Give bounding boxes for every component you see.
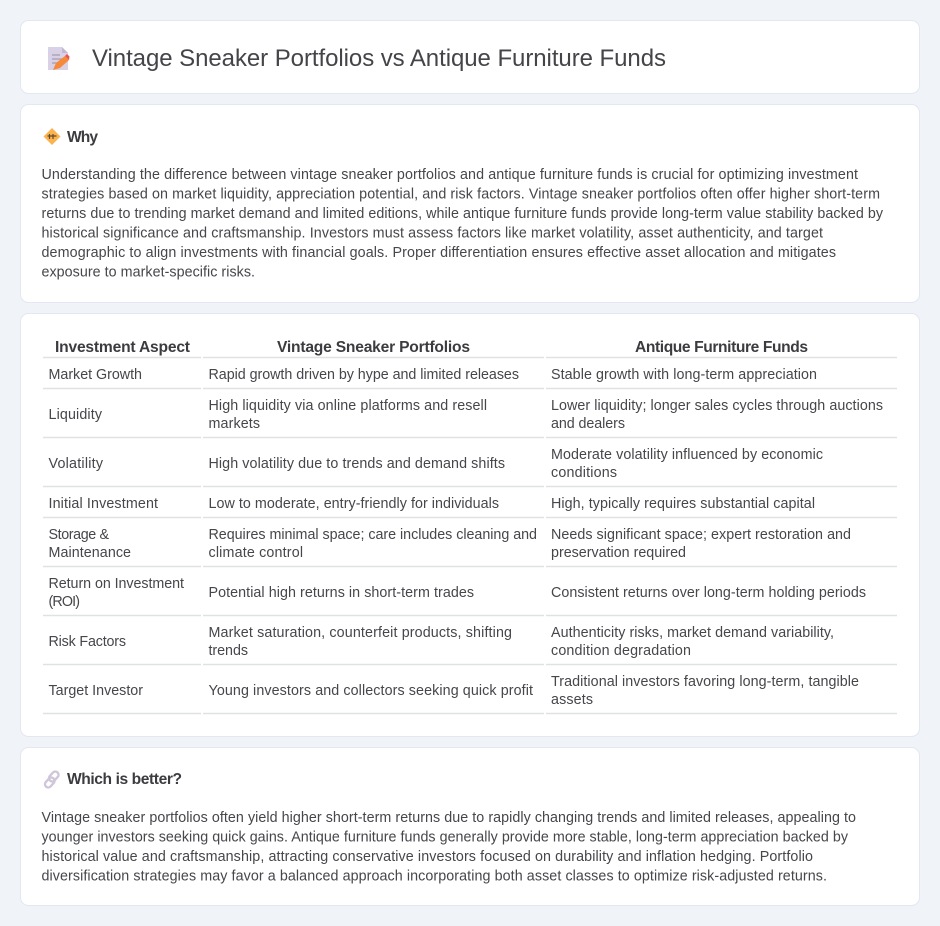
table header: Vintage Sneaker Portfolios bbox=[277, 339, 470, 356]
row: target investor: assets bbox=[551, 692, 593, 708]
row: volatility: High volatility due to trends and demand shifts bbox=[208, 456, 505, 472]
row: liquidity: and dealers bbox=[551, 416, 625, 432]
text block: which is better paragraph: historical value and craftsmanship, attracting conservative investors focused on durability and inflation hedging. Portfolio bbox=[42, 849, 813, 865]
row: storage and maintenance: Maintenance bbox=[48, 545, 131, 561]
row: market growth: Market Growth bbox=[48, 367, 142, 383]
row: market growth bbox=[48, 367, 817, 383]
row: target investor: Young investors and collectors seeking quick profit bbox=[208, 683, 533, 699]
panel: comparison table bbox=[20, 314, 920, 736]
row: risk factors: condition degradation bbox=[551, 643, 691, 659]
text block: why paragraph: returns due to trending market demand and limited editions, while antique furniture funds provide long-term value stability backed by bbox=[42, 206, 884, 222]
heading: why: Why bbox=[67, 129, 98, 146]
row: return on investment: Potential high returns in short-term trades bbox=[208, 585, 474, 601]
row: liquidity: High liquidity via online platforms and resell bbox=[208, 398, 487, 414]
text block: why paragraph bbox=[42, 167, 884, 280]
row: target investor: Traditional investors favoring long-term, tangible bbox=[551, 674, 859, 690]
table header: Investment Aspect bbox=[55, 339, 190, 356]
row: risk factors: trends bbox=[208, 643, 248, 659]
text block: why paragraph: demographic to align investments with financial goals. Proper differentiation ensures effective asset allocation and mitigates bbox=[42, 245, 836, 261]
row: initial investment bbox=[48, 496, 815, 512]
row: storage and maintenance: preservation required bbox=[551, 545, 686, 561]
row: return on investment bbox=[48, 576, 866, 610]
row: liquidity: markets bbox=[208, 416, 260, 432]
heading: which is better: Which is better? bbox=[67, 771, 182, 788]
row: risk factors bbox=[48, 625, 834, 659]
row: storage and maintenance: Requires minimal space; care includes cleaning and bbox=[208, 527, 537, 543]
icon: chain link bbox=[44, 770, 60, 789]
row: risk factors: Market saturation, counterfeit products, shifting bbox=[208, 625, 512, 641]
panel: which is better bbox=[20, 748, 920, 906]
icon: memo with pencil bbox=[48, 47, 70, 70]
text block: which is better paragraph: diversification strategies may favor a balanced approach incorporating both asset classes to optimize risk-adjusted returns. bbox=[42, 868, 827, 884]
text block: why paragraph: exposure to market-specific risks. bbox=[42, 264, 255, 280]
text block: why paragraph: Understanding the difference between vintage sneaker portfolios and antique furniture funds is crucial for optimizing investment bbox=[42, 167, 858, 183]
text block: why paragraph: historical significance and craftsmanship. Investors must assess factors like market volatility, asset authenticity, and target bbox=[42, 226, 823, 242]
icon: warning diamond bbox=[44, 128, 60, 145]
row: return on investment: Consistent returns over long-term holding periods bbox=[551, 585, 866, 601]
row: volatility: Moderate volatility influenced by economic bbox=[551, 447, 823, 463]
row: return on investment: (ROI) bbox=[48, 594, 80, 610]
row: liquidity: Lower liquidity; longer sales cycles through auctions bbox=[551, 398, 883, 414]
table header: Antique Furniture Funds bbox=[635, 339, 808, 356]
row: storage and maintenance: Storage & bbox=[48, 527, 109, 543]
row: liquidity: Liquidity bbox=[48, 407, 103, 423]
text block: which is better paragraph bbox=[42, 810, 856, 884]
row: volatility bbox=[48, 447, 823, 481]
row: return on investment: Return on Investment bbox=[48, 576, 184, 592]
row: market growth: Rapid growth driven by hype and limited releases bbox=[208, 367, 519, 383]
panel: title header bbox=[20, 20, 920, 94]
panel: why bbox=[20, 104, 920, 302]
row: storage and maintenance bbox=[48, 527, 851, 561]
row: storage and maintenance: climate control bbox=[208, 545, 303, 561]
table header bbox=[55, 339, 808, 356]
row: storage and maintenance: Needs significant space; expert restoration and bbox=[551, 527, 851, 543]
text block: which is better paragraph: younger investors seeking quick gains. Antique furniture funds generally provide more stable, long-term appreciation backed by bbox=[42, 830, 849, 846]
row: target investor bbox=[48, 674, 859, 708]
row: initial investment: Low to moderate, entry-friendly for individuals bbox=[208, 496, 499, 512]
text block: which is better paragraph: Vintage sneaker portfolios often yield higher short-term returns due to rapidly changing trends and limited releases, appealing to bbox=[42, 810, 856, 826]
row: liquidity bbox=[48, 398, 883, 432]
row: risk factors: Authenticity risks, market demand variability, bbox=[551, 625, 834, 641]
text block: why paragraph: strategies based on market liquidity, appreciation potential, and risk factors. Vintage sneaker portfolios often offer higher short-term bbox=[42, 186, 880, 202]
row: volatility: Volatility bbox=[48, 456, 104, 472]
row: market growth: Stable growth with long-term appreciation bbox=[551, 367, 817, 383]
title: Vintage Sneaker Portfolios vs Antique Furniture Funds bbox=[92, 45, 666, 72]
row: initial investment: High, typically requires substantial capital bbox=[551, 496, 815, 512]
row: initial investment: Initial Investment bbox=[48, 496, 158, 512]
row: risk factors: Risk Factors bbox=[48, 634, 126, 650]
row: volatility: conditions bbox=[551, 465, 617, 481]
row: target investor: Target Investor bbox=[48, 683, 143, 699]
